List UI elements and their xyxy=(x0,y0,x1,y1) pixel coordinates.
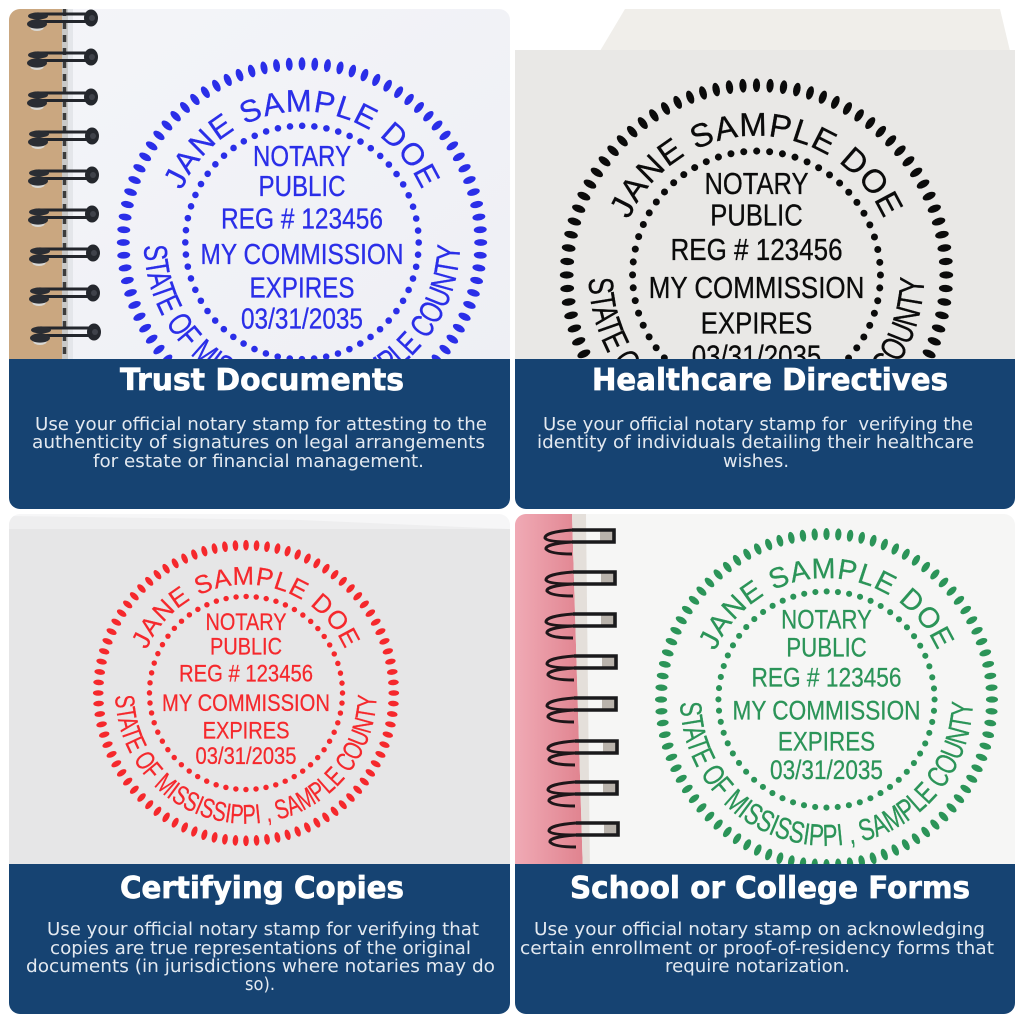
green notary stamp: REG # 123456 xyxy=(751,663,902,693)
green notary stamp: NOTARY xyxy=(781,605,872,635)
green notary stamp: JANE SAMPLE DOE xyxy=(700,558,954,650)
description: Use your official notary stamp on acknowledging xyxy=(534,920,985,940)
red notary stamp: MY COMMISSION xyxy=(162,690,330,717)
description: for estate or financial management. xyxy=(93,452,424,472)
description: authenticity of signatures on legal arrangements xyxy=(32,433,485,453)
description: wishes. xyxy=(723,452,789,472)
caption band xyxy=(515,864,1015,1014)
red notary stamp xyxy=(92,540,400,846)
green notary stamp: MY COMMISSION xyxy=(733,695,920,725)
panel: Trust Documents xyxy=(9,9,510,509)
blue notary stamp: MY COMMISSION xyxy=(200,239,404,271)
red notary stamp: STATE OF MISSISSIPPI , SAMPLE COUNTY xyxy=(115,694,376,826)
heading: Trust Documents xyxy=(120,363,404,398)
description xyxy=(538,416,973,468)
red notary stamp: PUBLIC xyxy=(210,634,282,661)
red notary stamp: 03/31/2035 xyxy=(196,743,296,770)
panel: Certifying Copies xyxy=(9,514,510,1014)
panel: School or College Forms xyxy=(515,514,1015,1014)
black notary stamp: JANE SAMPLE DOE xyxy=(611,112,904,218)
black notary stamp: PUBLIC xyxy=(710,198,803,233)
panel: Healthcare Directives xyxy=(515,9,1015,509)
red notary stamp: REG # 123456 xyxy=(179,660,313,687)
green notary stamp: EXPIRES xyxy=(778,726,875,756)
photo: stacked paper sheets xyxy=(515,9,1015,370)
caption band xyxy=(9,864,510,1014)
black notary stamp: EXPIRES xyxy=(701,305,812,340)
description: certain enrollment or proof-of-residency forms that xyxy=(520,939,994,959)
blue notary stamp: EXPIRES xyxy=(250,272,354,304)
green notary stamp xyxy=(655,528,998,864)
blue notary stamp: PUBLIC xyxy=(258,171,346,203)
photo: spiral notebook with pink cover xyxy=(515,514,1015,874)
description xyxy=(26,920,495,995)
green notary stamp: PUBLIC xyxy=(786,632,867,662)
black notary stamp xyxy=(560,78,954,359)
red notary stamp: NOTARY xyxy=(205,609,287,636)
black notary stamp: 03/31/2035 xyxy=(692,338,821,373)
black notary stamp: NOTARY xyxy=(704,166,809,201)
heading: Certifying Copies xyxy=(120,871,404,906)
description xyxy=(520,920,994,977)
blue notary stamp xyxy=(116,57,488,359)
description: copies are true representations of the original xyxy=(50,939,471,959)
caption band xyxy=(9,359,510,509)
caption band xyxy=(515,359,1015,509)
red notary stamp: JANE SAMPLE DOE xyxy=(132,566,360,648)
description: Use your official notary stamp for verifying that xyxy=(47,920,479,940)
green notary stamp: STATE OF MISSISSIPPI , SAMPLE COUNTY xyxy=(680,701,973,848)
blue notary stamp: 03/31/2035 xyxy=(241,304,363,336)
photo: paper sheet xyxy=(9,514,510,874)
blue notary stamp: STATE OF MISSISSIPPI , SAMPLE COUNTY xyxy=(144,244,460,359)
description: documents (in jurisdictions where notaries may do xyxy=(26,957,495,977)
blue notary stamp: JANE SAMPLE DOE xyxy=(165,90,440,188)
black notary stamp: REG # 123456 xyxy=(670,232,843,267)
description: Use your official notary stamp for verifying the xyxy=(543,415,973,435)
heading: School or College Forms xyxy=(570,871,970,906)
description: so). xyxy=(245,975,275,995)
description: Use your official notary stamp for attesting to the xyxy=(35,415,487,435)
green notary stamp: 03/31/2035 xyxy=(770,755,883,785)
description: require notarization. xyxy=(665,957,850,977)
black notary stamp: STATE OF MISSISSIPPI , SAMPLE COUNTY xyxy=(588,276,924,359)
red notary stamp: EXPIRES xyxy=(203,717,289,744)
blue notary stamp: REG # 123456 xyxy=(221,204,383,236)
heading: Healthcare Directives xyxy=(592,363,948,398)
black notary stamp: MY COMMISSION xyxy=(649,270,864,305)
description xyxy=(32,415,487,472)
photo: spiral notebook on kraft cover xyxy=(9,9,510,369)
description: identity of individuals detailing their healthcare xyxy=(537,433,974,453)
blue notary stamp: NOTARY xyxy=(253,141,351,173)
